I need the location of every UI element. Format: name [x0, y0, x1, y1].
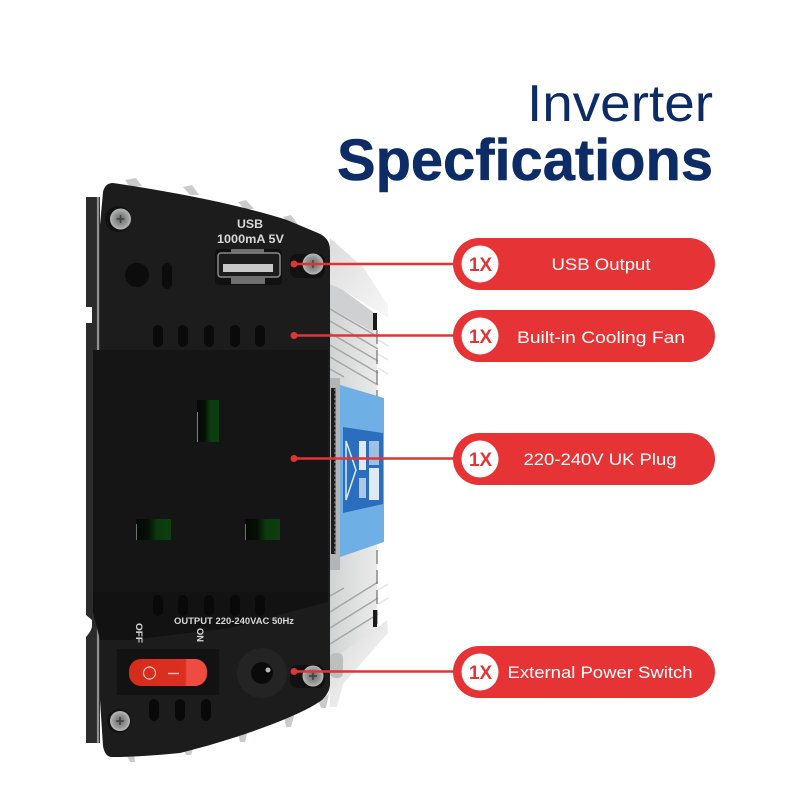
USB label: [217, 217, 284, 246]
callout: 220-240V UK Plug: 1X: [469, 450, 492, 471]
title: Inverter: [527, 75, 713, 133]
black front plate: [100, 183, 330, 757]
neutral pin slot: [245, 519, 280, 540]
callout: External Power Switch: 1X: [469, 663, 492, 684]
top and bottom fin tips: [125, 178, 329, 762]
earth pin slot: [197, 400, 219, 442]
inverter product illustration: [86, 178, 388, 762]
output label: OUTPUT 220-240VAC 50Hz: [174, 616, 295, 626]
round hole and slot: [125, 263, 172, 289]
lower vent slots: [153, 595, 265, 616]
callout: 220-240V UK Plug: 220-240V UK Plug: [524, 450, 676, 469]
upper vent slots: [153, 325, 265, 347]
aluminium heat-sink body: [328, 238, 388, 707]
callout: USB Output: 1X: [469, 255, 492, 276]
callout: Built-in Cooling Fan: [290, 310, 715, 362]
off and on labels: ON: [195, 628, 205, 642]
callout: External Power Switch: [290, 646, 715, 698]
callout: USB Output: USB Output: [552, 255, 651, 274]
callout: USB Output: [290, 238, 715, 290]
lower vents beneath switch: [149, 699, 211, 721]
USB port: [215, 249, 282, 285]
off and on labels: [134, 623, 205, 644]
blue product label: [340, 385, 384, 557]
USB label: USB: [237, 217, 263, 231]
left mounting rail: [86, 197, 100, 743]
USB label: 1000mA 5V: [217, 232, 284, 246]
title: Specfications: [337, 128, 713, 193]
live pin slot: [136, 519, 171, 540]
callout: Built-in Cooling Fan: Built-in Cooling Fan: [517, 328, 685, 347]
title: [337, 75, 713, 193]
callout: External Power Switch: External Power Switch: [508, 663, 692, 682]
rocker switch: [117, 649, 219, 695]
off and on labels: OFF: [134, 623, 144, 644]
UK socket panel: [93, 350, 328, 640]
callout: 220-240V UK Plug: [290, 433, 715, 485]
indicator lamp: [237, 648, 287, 698]
callout: Built-in Cooling Fan: 1X: [469, 327, 492, 348]
screws: [105, 206, 325, 733]
